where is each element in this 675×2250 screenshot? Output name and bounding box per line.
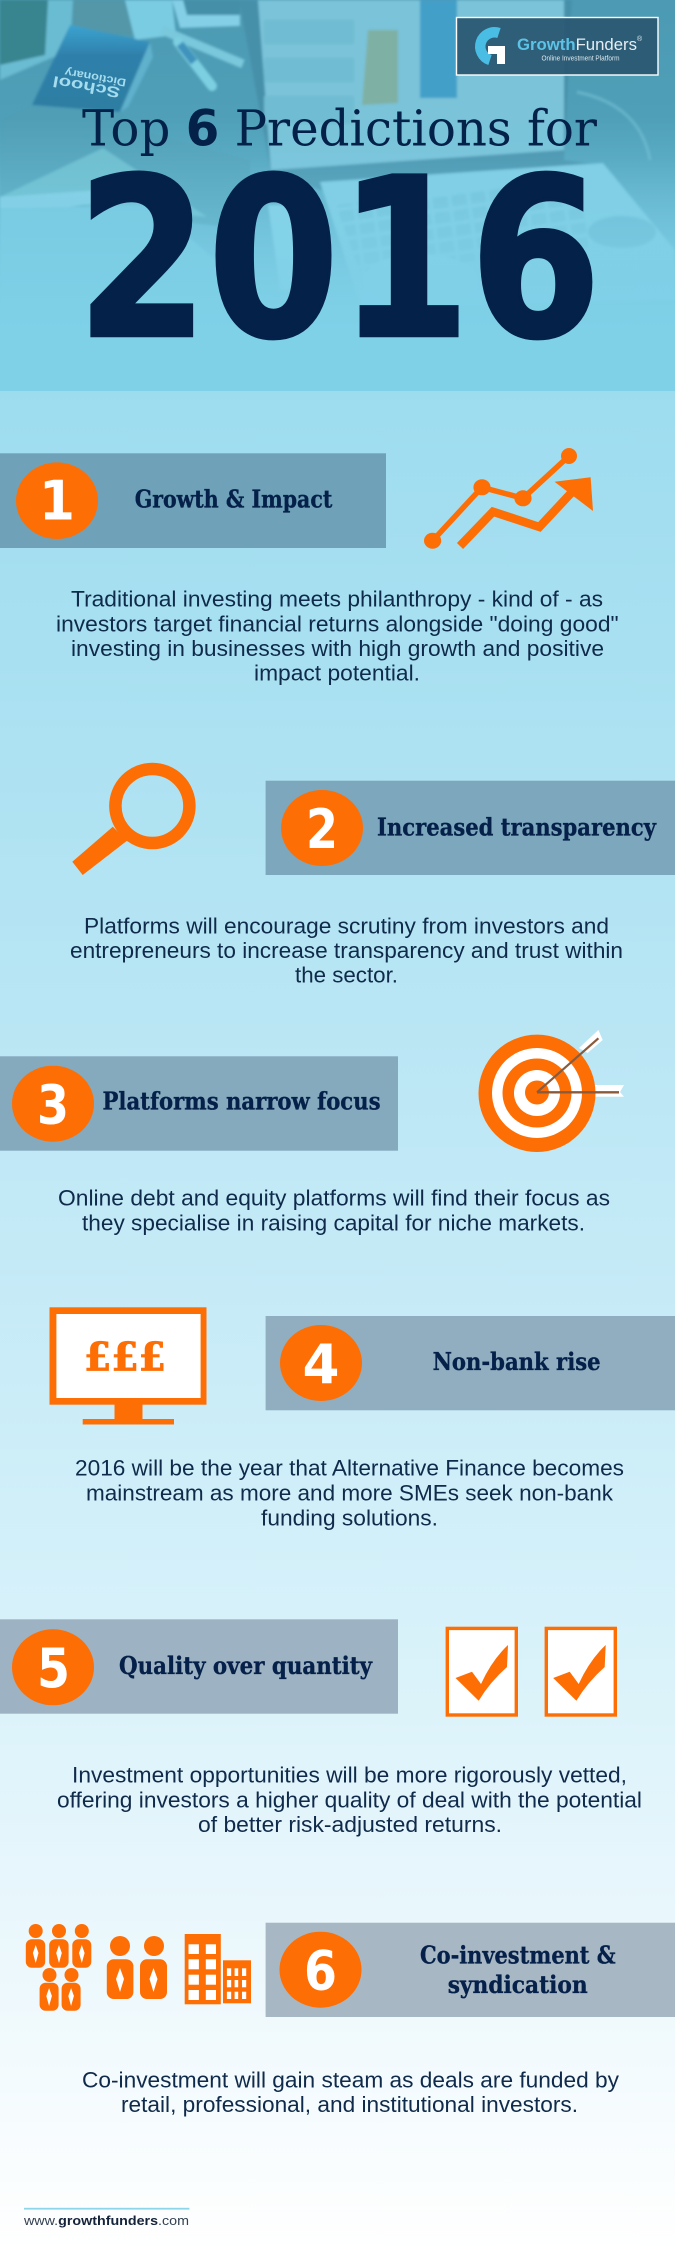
book cover text: Dictionary [63,65,127,88]
logo: GrowthFunders: Online Investment Platform [542,54,620,62]
heading 4: Non-bank rise [433,1347,601,1376]
icon: monitor with pounds [50,1307,206,1424]
footer: website: www.growthfunders .com [23,2213,189,2228]
text block: prediction 1: investors target financial returns alongside "doing good" [56,611,619,636]
header photo background [0,0,675,391]
book cover text [52,65,127,101]
panel: prediction 3 heading bar [0,1056,398,1151]
text block: prediction 6: retail, professional, and institutional investors. [121,2092,578,2117]
icon: rising chart and arrow [424,448,593,549]
icon: target with arrows [478,1030,624,1152]
panel: prediction 1 heading bar [0,453,386,548]
number badge 5: 5 [37,1637,70,1700]
text block: prediction 2 [70,913,623,988]
icon: check boxes [447,1628,615,1715]
text block: prediction 5: offering investors a higher quality of deal with the potential [57,1787,642,1812]
heading 6 [420,1940,616,1999]
panel: prediction 6 heading bar [266,1923,675,2017]
text block: prediction 3: they specialise in raising capital for niche markets. [82,1211,585,1236]
text block: prediction 2: the sector. [295,963,398,988]
number badge 2: 2 [306,798,338,861]
number badge 4 [280,1325,362,1401]
text block: prediction 4 [75,1456,624,1530]
number badge 6: 6 [304,1940,337,2002]
text block: prediction 3: Online debt and equity platforms will find their focus as [58,1186,610,1211]
text block: prediction 5: of better risk-adjusted returns. [198,1812,502,1837]
heading 3: Platforms narrow focus [102,1086,380,1115]
number badge 5 [12,1629,94,1705]
text block: prediction 1: Traditional investing meets philanthropy - kind of - as [71,587,603,612]
icon: monitor with pounds: £££ [84,1335,166,1381]
text block: prediction 4: 2016 will be the year that Alternative Finance becomes [75,1456,624,1481]
text block: prediction 2: Platforms will encourage scrutiny from investors and [84,913,609,938]
book cover text: School [52,72,121,101]
text block: prediction 4: mainstream as more and more SMEs seek non-bank [86,1481,614,1506]
number badge 3: 3 [37,1074,69,1136]
logo: GrowthFunders: ® [637,35,643,43]
number badge 3 [12,1066,94,1142]
text block: prediction 5 [57,1762,642,1837]
panel: prediction 4 heading bar [266,1316,675,1410]
text block: prediction 6 [82,2067,619,2117]
text block: prediction 1 [56,587,619,686]
text block: prediction 3 [58,1186,610,1236]
text block: prediction 1: impact potential. [254,661,420,686]
icon: investors and buildings [26,1924,251,2011]
number badge 6 [280,1932,362,2008]
number badge 2 [281,790,363,866]
heading 6: syndication [448,1970,588,1999]
heading 6: Co-investment & [420,1940,616,1969]
title: 2016: 2016 [77,132,601,388]
panel: prediction 2 heading bar [266,781,675,875]
text block: prediction 6: Co-investment will gain steam as deals are funded by [82,2067,619,2092]
heading 1: Growth & Impact [135,485,332,514]
number badge 1 [16,462,98,539]
logo: GrowthFunders [456,18,658,75]
number badge 4: 4 [302,1333,340,1396]
heading 5: Quality over quantity [119,1651,373,1680]
text block: prediction 1: investing in businesses with high growth and positive [71,636,604,661]
title: Top 6 Predictions for: Top 6 Predictions for [82,99,597,157]
text block: prediction 4: funding solutions. [261,1505,438,1530]
text block: prediction 5: Investment opportunities will be more rigorously vetted, [72,1762,627,1787]
icon: magnifying glass [72,769,189,875]
logo: GrowthFunders: GrowthFunders [517,35,637,54]
number badge 1: 1 [39,470,75,532]
panel: prediction 5 heading bar [0,1619,398,1714]
text block: prediction 2: entrepreneurs to increase transparency and trust within [70,938,623,963]
